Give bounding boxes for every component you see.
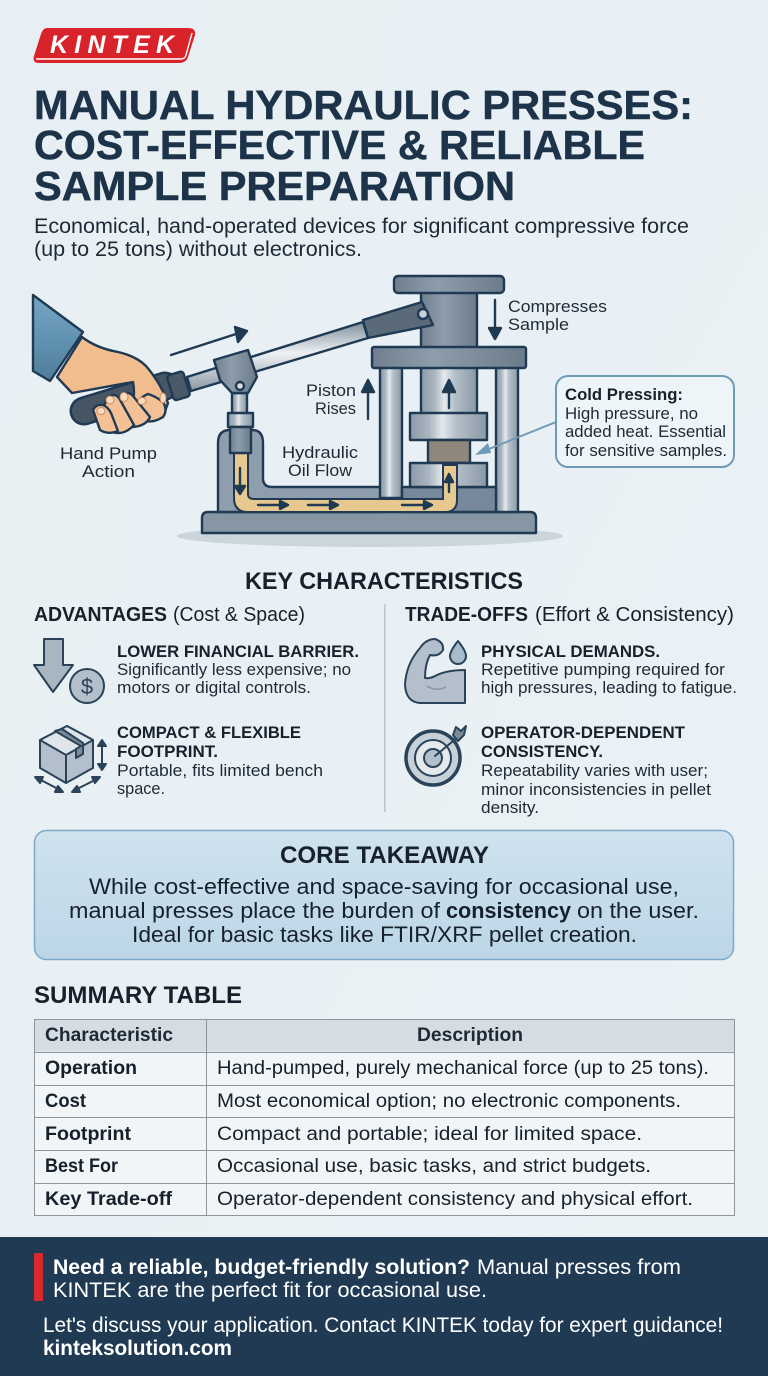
- takeaway body: on the user.: [577, 898, 699, 923]
- text: lower financial barrier: LOWER FINANCIAL BARRIER.: [117, 642, 359, 661]
- trade-offs heading: TRADE-OFFS: [405, 604, 528, 626]
- lever handle: [187, 302, 433, 393]
- subtitle: (up to 25 tons) without electronics.: [34, 238, 362, 261]
- footer message: Need a reliable, budget-friendly solution?: [53, 1256, 470, 1279]
- finger nails: [97, 392, 166, 414]
- callout: cold pressing: for sensitive samples.: [565, 441, 727, 460]
- text: operator-dependent consistency: density.: [481, 798, 539, 817]
- oil flow arrows: [235, 468, 453, 509]
- row: footprint: Footprint: [45, 1124, 132, 1145]
- sleeve: [33, 295, 83, 381]
- table header: Characteristic: [45, 1025, 173, 1046]
- icon: muscle and sweat drop: [405, 639, 466, 703]
- grip: [84, 371, 190, 411]
- label: piston rises: Piston: [306, 381, 356, 400]
- row: operation: [45, 1058, 709, 1079]
- row: footprint: Compact and portable; ideal for limited space.: [217, 1124, 642, 1145]
- footer contact line: kinteksolution.com: [43, 1337, 232, 1360]
- text: operator-dependent consistency: Repeatability varies with user;: [481, 761, 708, 780]
- panel: core takeaway: [34, 830, 734, 960]
- advantages heading: ADVANTAGES: [34, 604, 167, 626]
- red accent bar: [34, 1253, 43, 1301]
- callout: cold pressing: High pressure, no: [565, 404, 698, 423]
- label: hydraulic oil flow: [282, 443, 359, 480]
- row: best for: Best For: [45, 1156, 119, 1177]
- table header: [45, 1025, 523, 1046]
- text: compact and flexible footprint: [117, 723, 323, 798]
- row: cost: Cost: [45, 1091, 87, 1112]
- text: operator-dependent consistency: CONSISTENCY.: [481, 742, 603, 761]
- title: COST-EFFECTIVE & RELIABLE: [34, 122, 645, 168]
- label: hydraulic oil flow: Hydraulic: [282, 443, 359, 462]
- label: piston rises: [306, 381, 356, 418]
- icon: target with arrow: [406, 726, 466, 785]
- advantages heading: (Cost & Space): [173, 604, 305, 626]
- title: SAMPLE PREPARATION: [34, 163, 515, 209]
- fingers: [93, 393, 166, 433]
- cylinder block: [402, 487, 496, 512]
- text: operator-dependent consistency: [481, 723, 711, 817]
- heading: key characteristics: KEY CHARACTERISTICS: [245, 568, 523, 595]
- label: hydraulic oil flow: Oil Flow: [288, 461, 353, 480]
- label: compresses sample: Compresses: [508, 297, 607, 316]
- takeaway heading: CORE TAKEAWAY: [280, 842, 489, 869]
- row: best for: Occasional use, basic tasks, and strict budgets.: [217, 1156, 651, 1177]
- trade-offs heading: [405, 604, 734, 626]
- label: compresses sample: Sample: [508, 315, 569, 334]
- subtitle: Economical, hand-operated devices for significant compressive force: [34, 215, 689, 238]
- text: physical demands: [481, 642, 737, 697]
- icon: down arrow and dollar: [34, 639, 104, 703]
- title: [34, 82, 693, 209]
- panel: trade-offs: [405, 604, 737, 817]
- text: compact and flexible footprint: FOOTPRINT.: [117, 742, 218, 761]
- text: compact and flexible footprint: space.: [117, 779, 165, 798]
- takeaway body: While cost-effective and space-saving for occasional use,: [89, 874, 679, 899]
- table header: Description: [417, 1025, 523, 1046]
- row: operation: Operation: [45, 1058, 137, 1079]
- label: hand pump action: [60, 444, 157, 481]
- label: hand pump action: Hand Pump: [60, 444, 157, 463]
- compress arrow: [489, 300, 501, 339]
- text: physical demands: Repetitive pumping required for: [481, 660, 725, 679]
- callout: cold pressing: added heat. Essential: [565, 422, 726, 441]
- row: key trade-off: [45, 1189, 693, 1210]
- footer contact line: [43, 1314, 723, 1360]
- callout: cold pressing: [475, 376, 734, 467]
- callout: cold pressing: Cold Pressing:: [565, 385, 683, 404]
- label: hand pump action: Action: [82, 462, 135, 481]
- hand back: [57, 337, 168, 417]
- piston and platens: [410, 367, 487, 487]
- row: key trade-off: Key Trade-off: [45, 1189, 173, 1210]
- text: lower financial barrier: [117, 642, 359, 697]
- press pillars: [380, 367, 518, 512]
- logo: KINTEK: [34, 28, 195, 63]
- motion arrow: [171, 327, 247, 355]
- takeaway body: manual presses place the burden of: [69, 898, 441, 923]
- press base: [202, 512, 536, 533]
- title: MANUAL HYDRAULIC PRESSES:: [34, 82, 693, 128]
- advantages heading: [34, 604, 305, 626]
- row: cost: Most economical option; no electronic components.: [217, 1091, 681, 1112]
- row: cost: [45, 1091, 681, 1112]
- footer message: KINTEK are the perfect fit for occasional use.: [53, 1279, 487, 1302]
- trade-offs heading: (Effort & Consistency): [535, 604, 734, 626]
- takeaway body: consistency: [446, 898, 572, 923]
- text: compact and flexible footprint: COMPACT & FLEXIBLE: [117, 723, 301, 742]
- illustration: manual hydraulic press: [33, 276, 734, 547]
- footer contact line: Let's discuss your application. Contact KINTEK today for expert guidance!: [43, 1314, 723, 1337]
- piston rises arrow: [362, 380, 374, 419]
- icon: box with arrows: [35, 726, 106, 792]
- row: key trade-off: Operator-dependent consistency and physical effort.: [217, 1189, 693, 1210]
- icon: down arrow and dollar: $: [81, 674, 93, 699]
- footer call to action: [0, 1237, 768, 1376]
- label: compresses sample: [508, 297, 607, 334]
- text: operator-dependent consistency: OPERATOR-DEPENDENT: [481, 723, 686, 742]
- label: piston rises: Rises: [315, 399, 356, 418]
- footer message: [53, 1256, 681, 1302]
- row: footprint: [45, 1124, 642, 1145]
- subtitle: [34, 215, 689, 261]
- pump piston: [228, 393, 253, 453]
- takeaway body: Ideal for basic tasks like FTIR/XRF pellet creation.: [132, 922, 637, 947]
- logo: KINTEK: KINTEK: [50, 31, 176, 59]
- summary table: [34, 1020, 734, 1216]
- panel: advantages: [34, 604, 359, 798]
- hydraulic oil channel: [234, 452, 457, 512]
- heading: summary table: SUMMARY TABLE: [34, 982, 242, 1009]
- text: lower financial barrier: Significantly less expensive; no: [117, 660, 351, 679]
- press head: [372, 276, 526, 368]
- pump housing: [218, 430, 382, 512]
- footer message: Manual presses from: [477, 1256, 681, 1279]
- row: best for: [45, 1156, 651, 1177]
- text: operator-dependent consistency: minor inconsistencies in pellet: [481, 780, 711, 799]
- text: physical demands: high pressures, leading to fatigue.: [481, 678, 737, 697]
- takeaway body: [69, 874, 699, 947]
- text: physical demands: PHYSICAL DEMANDS.: [481, 642, 660, 661]
- text: compact and flexible footprint: Portable, fits limited bench: [117, 761, 323, 780]
- row: operation: Hand-pumped, purely mechanical force (up to 25 tons).: [217, 1058, 709, 1079]
- text: lower financial barrier: motors or digital controls.: [117, 678, 311, 697]
